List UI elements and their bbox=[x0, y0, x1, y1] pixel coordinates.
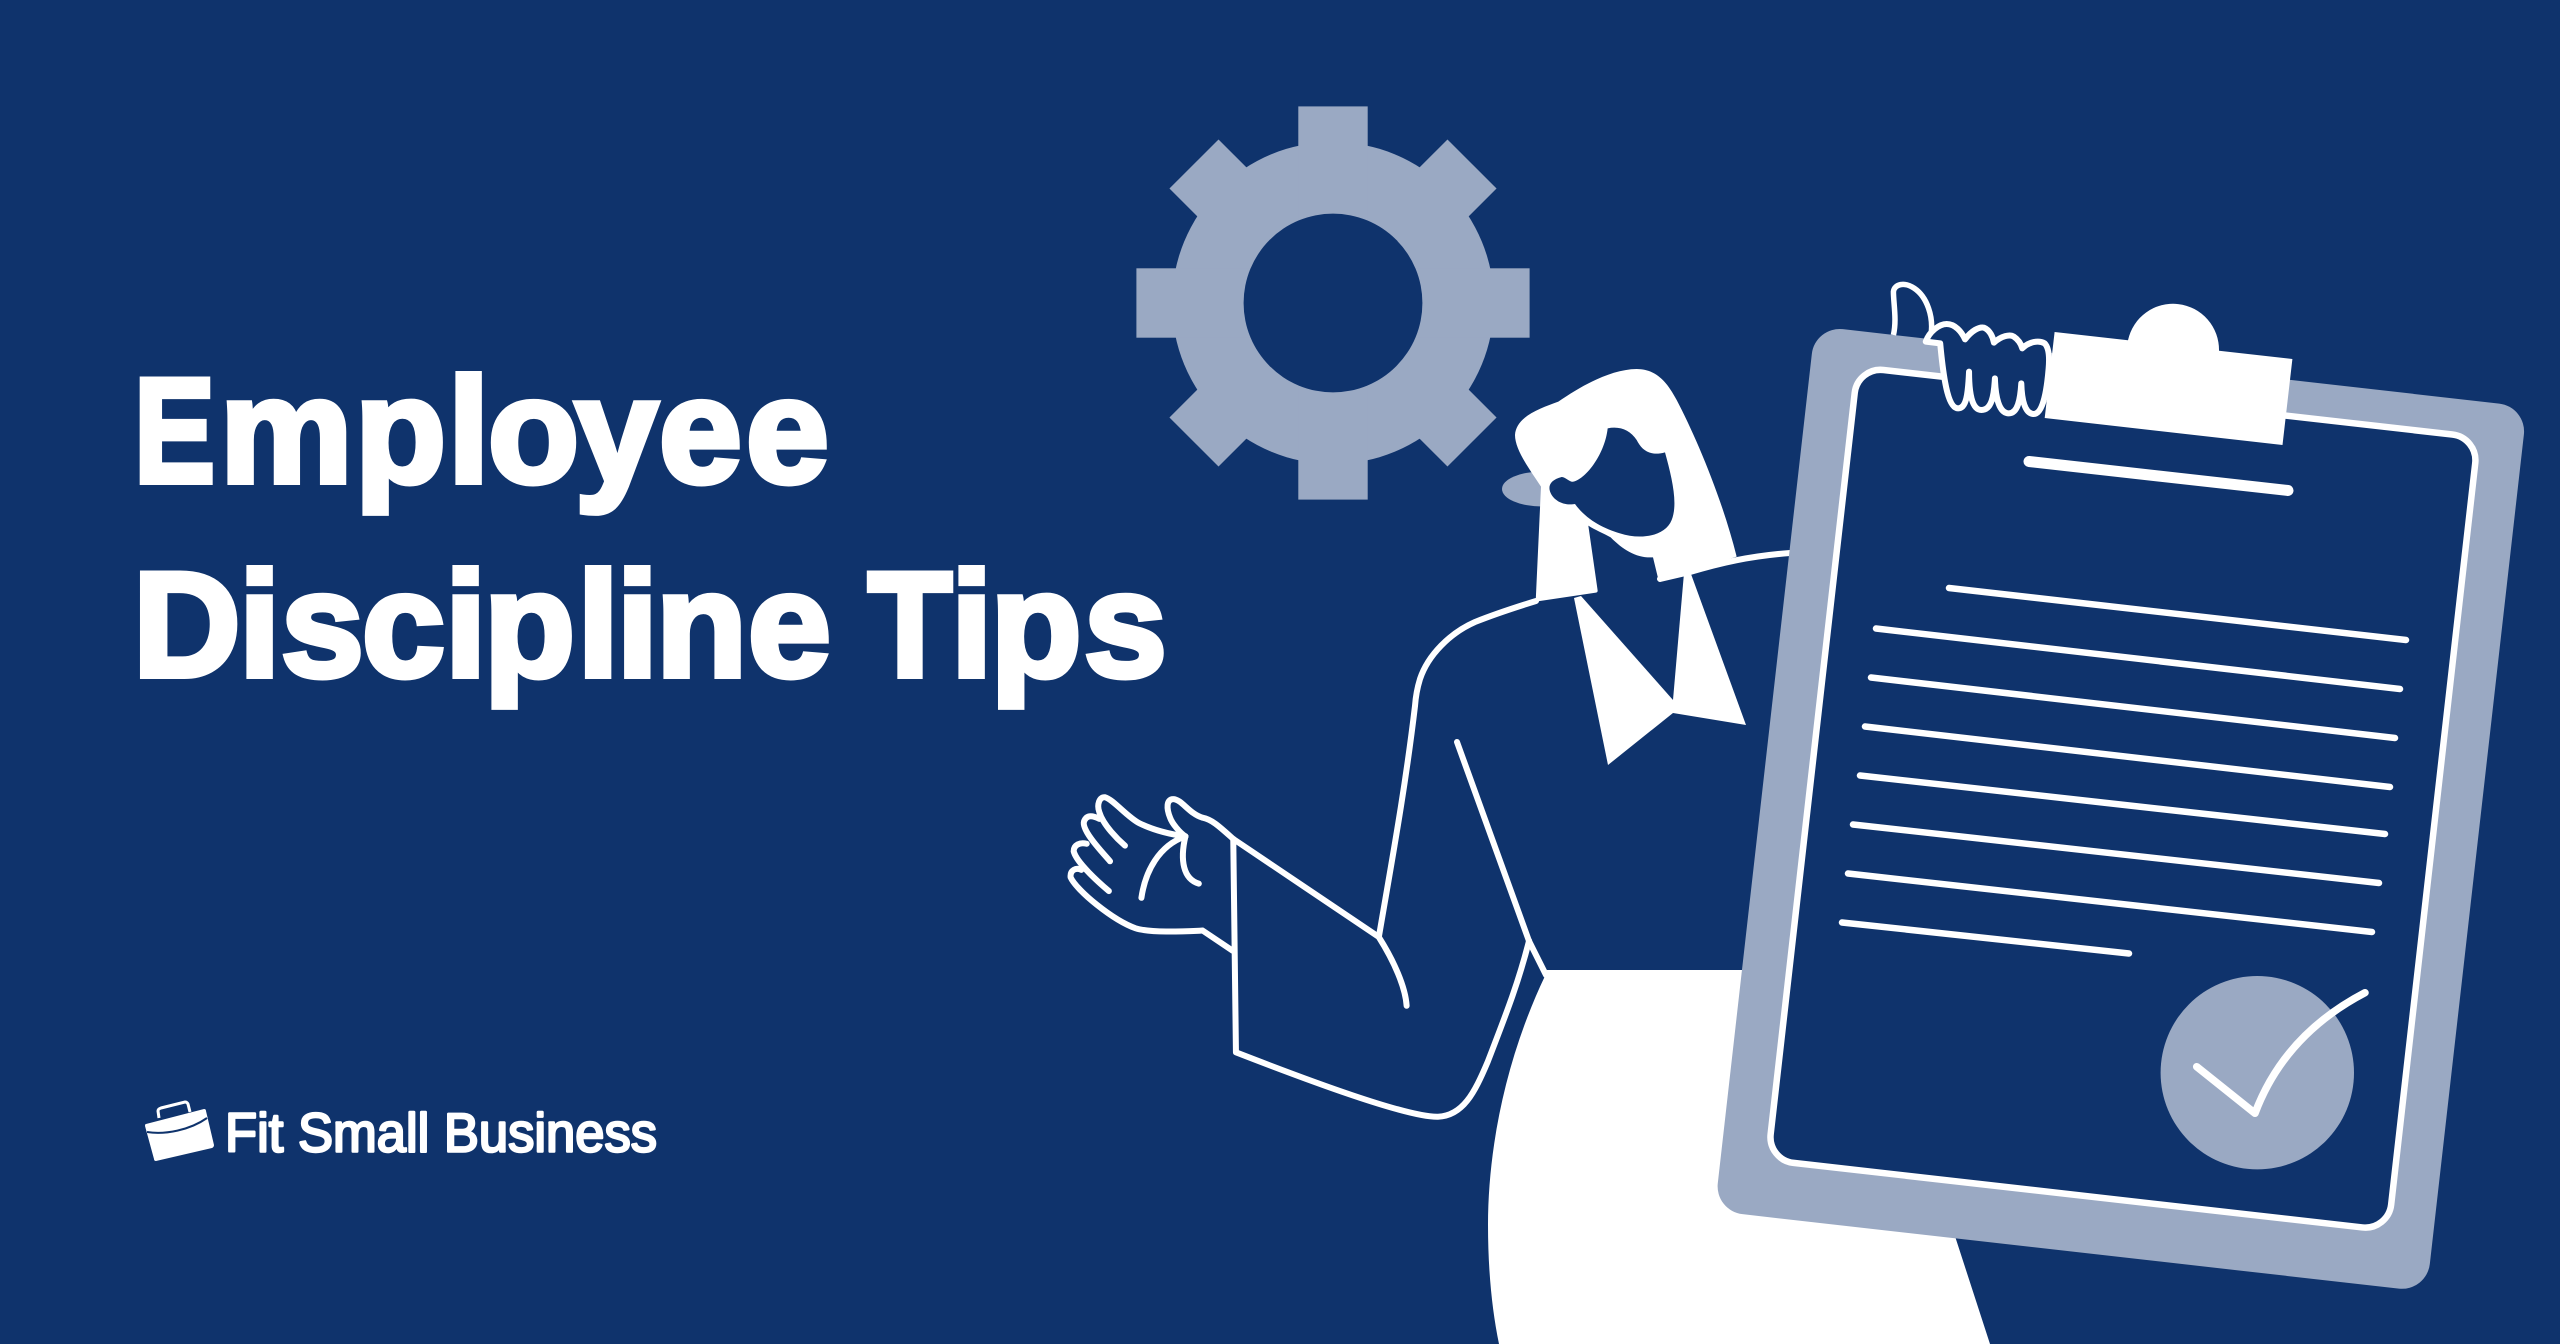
paper heading line bbox=[2029, 462, 2288, 490]
title: ips bbox=[951, 541, 1167, 708]
arm and body outline bbox=[1233, 553, 1790, 1117]
title bbox=[133, 347, 1167, 708]
hair and face bbox=[1515, 369, 1737, 602]
collar bbox=[1574, 573, 1746, 765]
title: T bbox=[868, 541, 952, 708]
paper text lines bbox=[1842, 588, 2406, 954]
hand bbox=[1071, 797, 1233, 951]
title: mployee bbox=[220, 347, 829, 514]
panel: clipboard bbox=[1715, 284, 2527, 1292]
skirt bbox=[1488, 970, 1990, 1344]
icon: briefcase bbox=[145, 1102, 214, 1161]
clipboard board bbox=[1715, 326, 2527, 1292]
icon: gear bbox=[1136, 106, 1530, 500]
fingers on clip bbox=[1926, 324, 2049, 414]
logo: Fit Small Business bbox=[145, 1102, 657, 1164]
clipboard paper bbox=[1768, 367, 2478, 1230]
thumb bbox=[1893, 284, 1932, 337]
person: businesswoman bbox=[1071, 369, 1990, 1344]
clip bbox=[2045, 304, 2292, 445]
grey ellipse behind head bbox=[1502, 472, 1582, 506]
logo wordmark: Fit Small Business bbox=[225, 1102, 657, 1164]
approval circle bbox=[2161, 976, 2354, 1169]
check mark bbox=[2197, 993, 2365, 1113]
title: E bbox=[134, 347, 215, 514]
title: Discipline bbox=[133, 541, 901, 708]
